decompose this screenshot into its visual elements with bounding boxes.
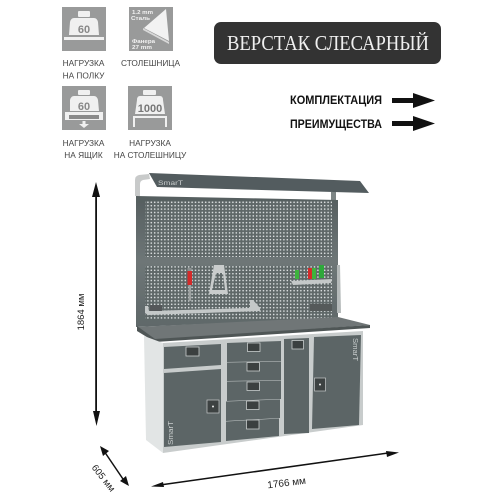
text: tabletop label: СТОЛЕШНИЦА — [121, 58, 180, 68]
cabinet side — [144, 336, 163, 453]
text: load on tabletop label: НА СТОЛЕШНИЦУ — [114, 150, 187, 160]
long shelf — [145, 300, 260, 315]
lamp canopy: SmarT — [158, 180, 183, 187]
drawer column — [226, 341, 281, 441]
text: load on drawer label: НАГРУЗКА — [63, 138, 105, 148]
dimension: height: 1864 мм — [76, 294, 87, 330]
icon: load on tabletop: 1000 — [138, 103, 162, 115]
lamp bracket right — [331, 192, 336, 201]
icon: tabletop layers: Сталь — [131, 16, 150, 22]
cabinet front — [163, 331, 363, 453]
icon: load on shelf: 60 — [78, 24, 90, 36]
door right — [312, 335, 361, 429]
dimension: height — [76, 182, 100, 426]
door right: SmarT — [351, 338, 358, 362]
icon: tabletop layers: 27 mm — [132, 45, 153, 51]
drawer handles — [186, 340, 304, 429]
text: load on drawer label: НА ЯЩИК — [64, 150, 103, 160]
door left: SmarT — [168, 420, 175, 445]
text: load on tabletop label: НАГРУЗКА — [129, 138, 171, 148]
icon: tabletop layers: 1.2 mm — [132, 10, 154, 16]
title: ВЕРСТАК СЛЕСАРНЫЙ — [227, 31, 429, 55]
tool tray rack — [209, 265, 228, 294]
icon: load on shelf — [62, 7, 106, 51]
title — [214, 22, 441, 64]
link: equipment: КОМПЛЕКТАЦИЯ — [290, 95, 382, 107]
icon: tabletop layers: Фанера — [132, 39, 155, 45]
dimension: depth — [89, 446, 129, 494]
icon: load on tabletop — [128, 86, 172, 130]
drawer top left — [164, 344, 221, 369]
text: load on shelf label: НАГРУЗКА — [63, 58, 105, 68]
dimension: width: 1766 мм — [267, 476, 307, 491]
lamp bracket left — [135, 174, 150, 196]
icon: load on drawer: 60 — [78, 101, 90, 113]
text: load on drawer label — [63, 138, 105, 160]
icon: tabletop layers — [129, 7, 173, 51]
small box left — [150, 305, 162, 311]
small box right — [310, 304, 332, 311]
workbench illustration — [135, 173, 370, 453]
text: load on tabletop label — [114, 138, 187, 160]
link: equipment — [290, 93, 435, 108]
link: advantages — [290, 116, 435, 131]
green and red tools — [295, 265, 324, 279]
door left — [164, 369, 221, 447]
pegboard panel — [136, 196, 338, 327]
text: load on shelf label — [63, 58, 105, 80]
tabletop — [137, 317, 370, 342]
screwdriver — [188, 268, 192, 301]
link: advantages: ПРЕИМУЩЕСТВА — [290, 119, 382, 131]
dimension: depth: 605 мм — [89, 463, 117, 494]
side strut — [337, 265, 341, 313]
icon: load on drawer — [62, 86, 106, 130]
lamp canopy — [149, 173, 369, 193]
dimension: width — [151, 451, 399, 491]
small tool shelf — [291, 279, 332, 285]
text: load on shelf label: НА ПОЛКУ — [63, 70, 105, 80]
narrow door — [284, 338, 309, 434]
